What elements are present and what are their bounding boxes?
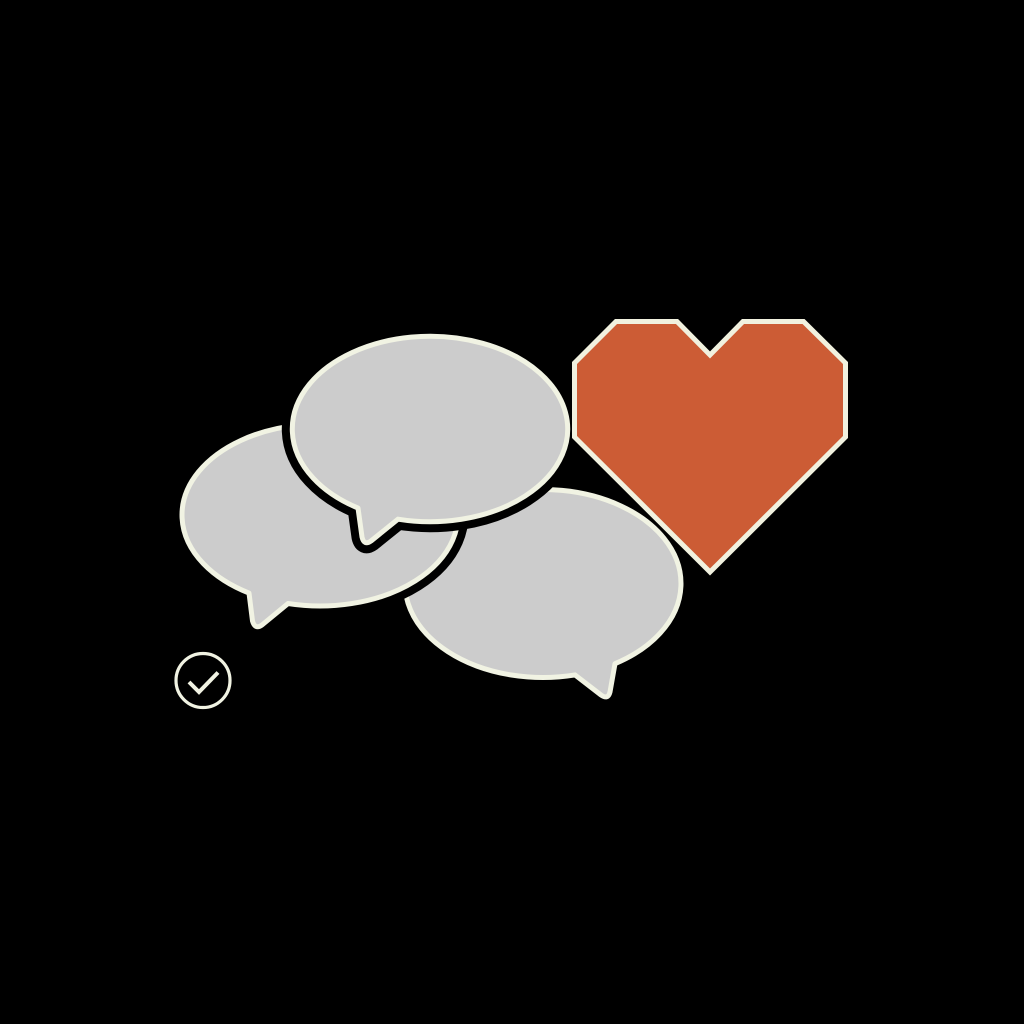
icon: check mark in circle	[176, 654, 230, 708]
speech bubble: bottom right	[405, 490, 681, 697]
speech bubble: top center	[292, 336, 568, 543]
speech bubble: left	[182, 424, 458, 627]
icon: orange geometric heart	[574, 322, 846, 572]
